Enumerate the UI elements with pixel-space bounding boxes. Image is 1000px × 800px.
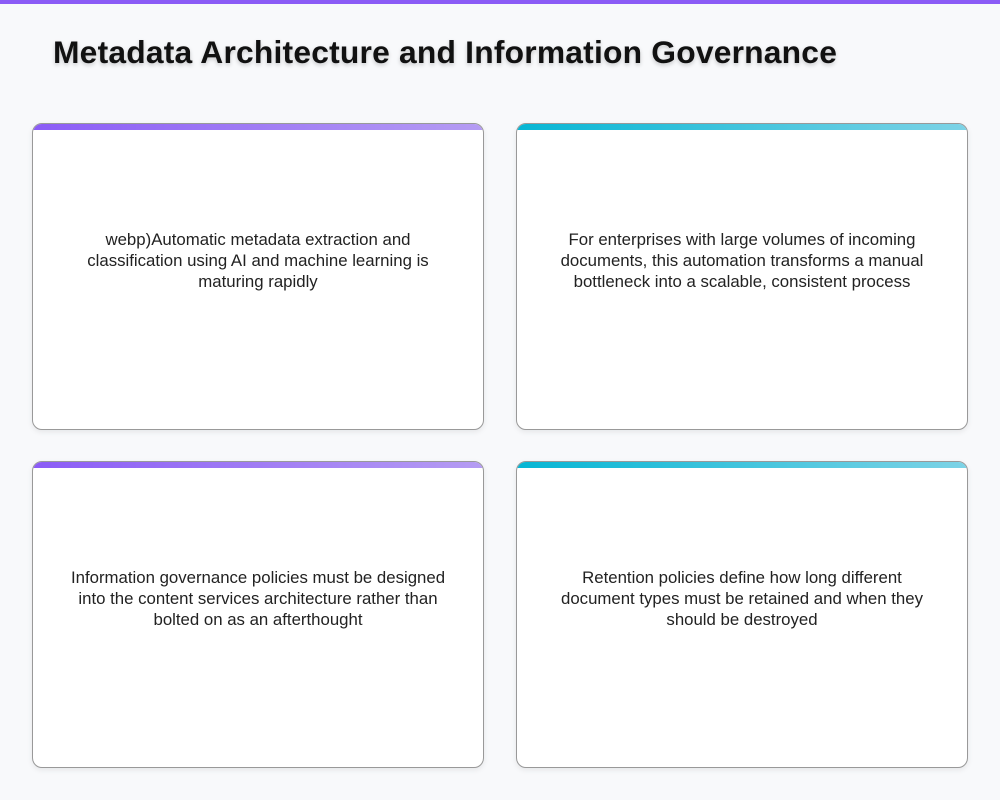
- panel: metadata extraction: webp)Automatic metadata extraction and classification using AI and machine learning is maturing rapidly: [87, 230, 429, 291]
- panel: governance policies: [32, 461, 484, 768]
- panel: retention policies: Retention policies define how long different document types must be retained and when they should be destroyed: [561, 568, 923, 629]
- panel: automation: For enterprises with large volumes of incoming documents, this automation transforms a manual bottleneck into a scalable, consistent process: [561, 230, 923, 291]
- panel: automation: [516, 123, 968, 430]
- panel: metadata extraction: [32, 123, 484, 430]
- title: Metadata Architecture and Information Governance: [53, 34, 837, 70]
- panel: retention policies: [516, 461, 968, 768]
- panel: governance policies: Information governance policies must be designed into the content services architecture rather than bolted on as an afterthought: [71, 568, 445, 629]
- top accent bar: [0, 0, 1000, 4]
